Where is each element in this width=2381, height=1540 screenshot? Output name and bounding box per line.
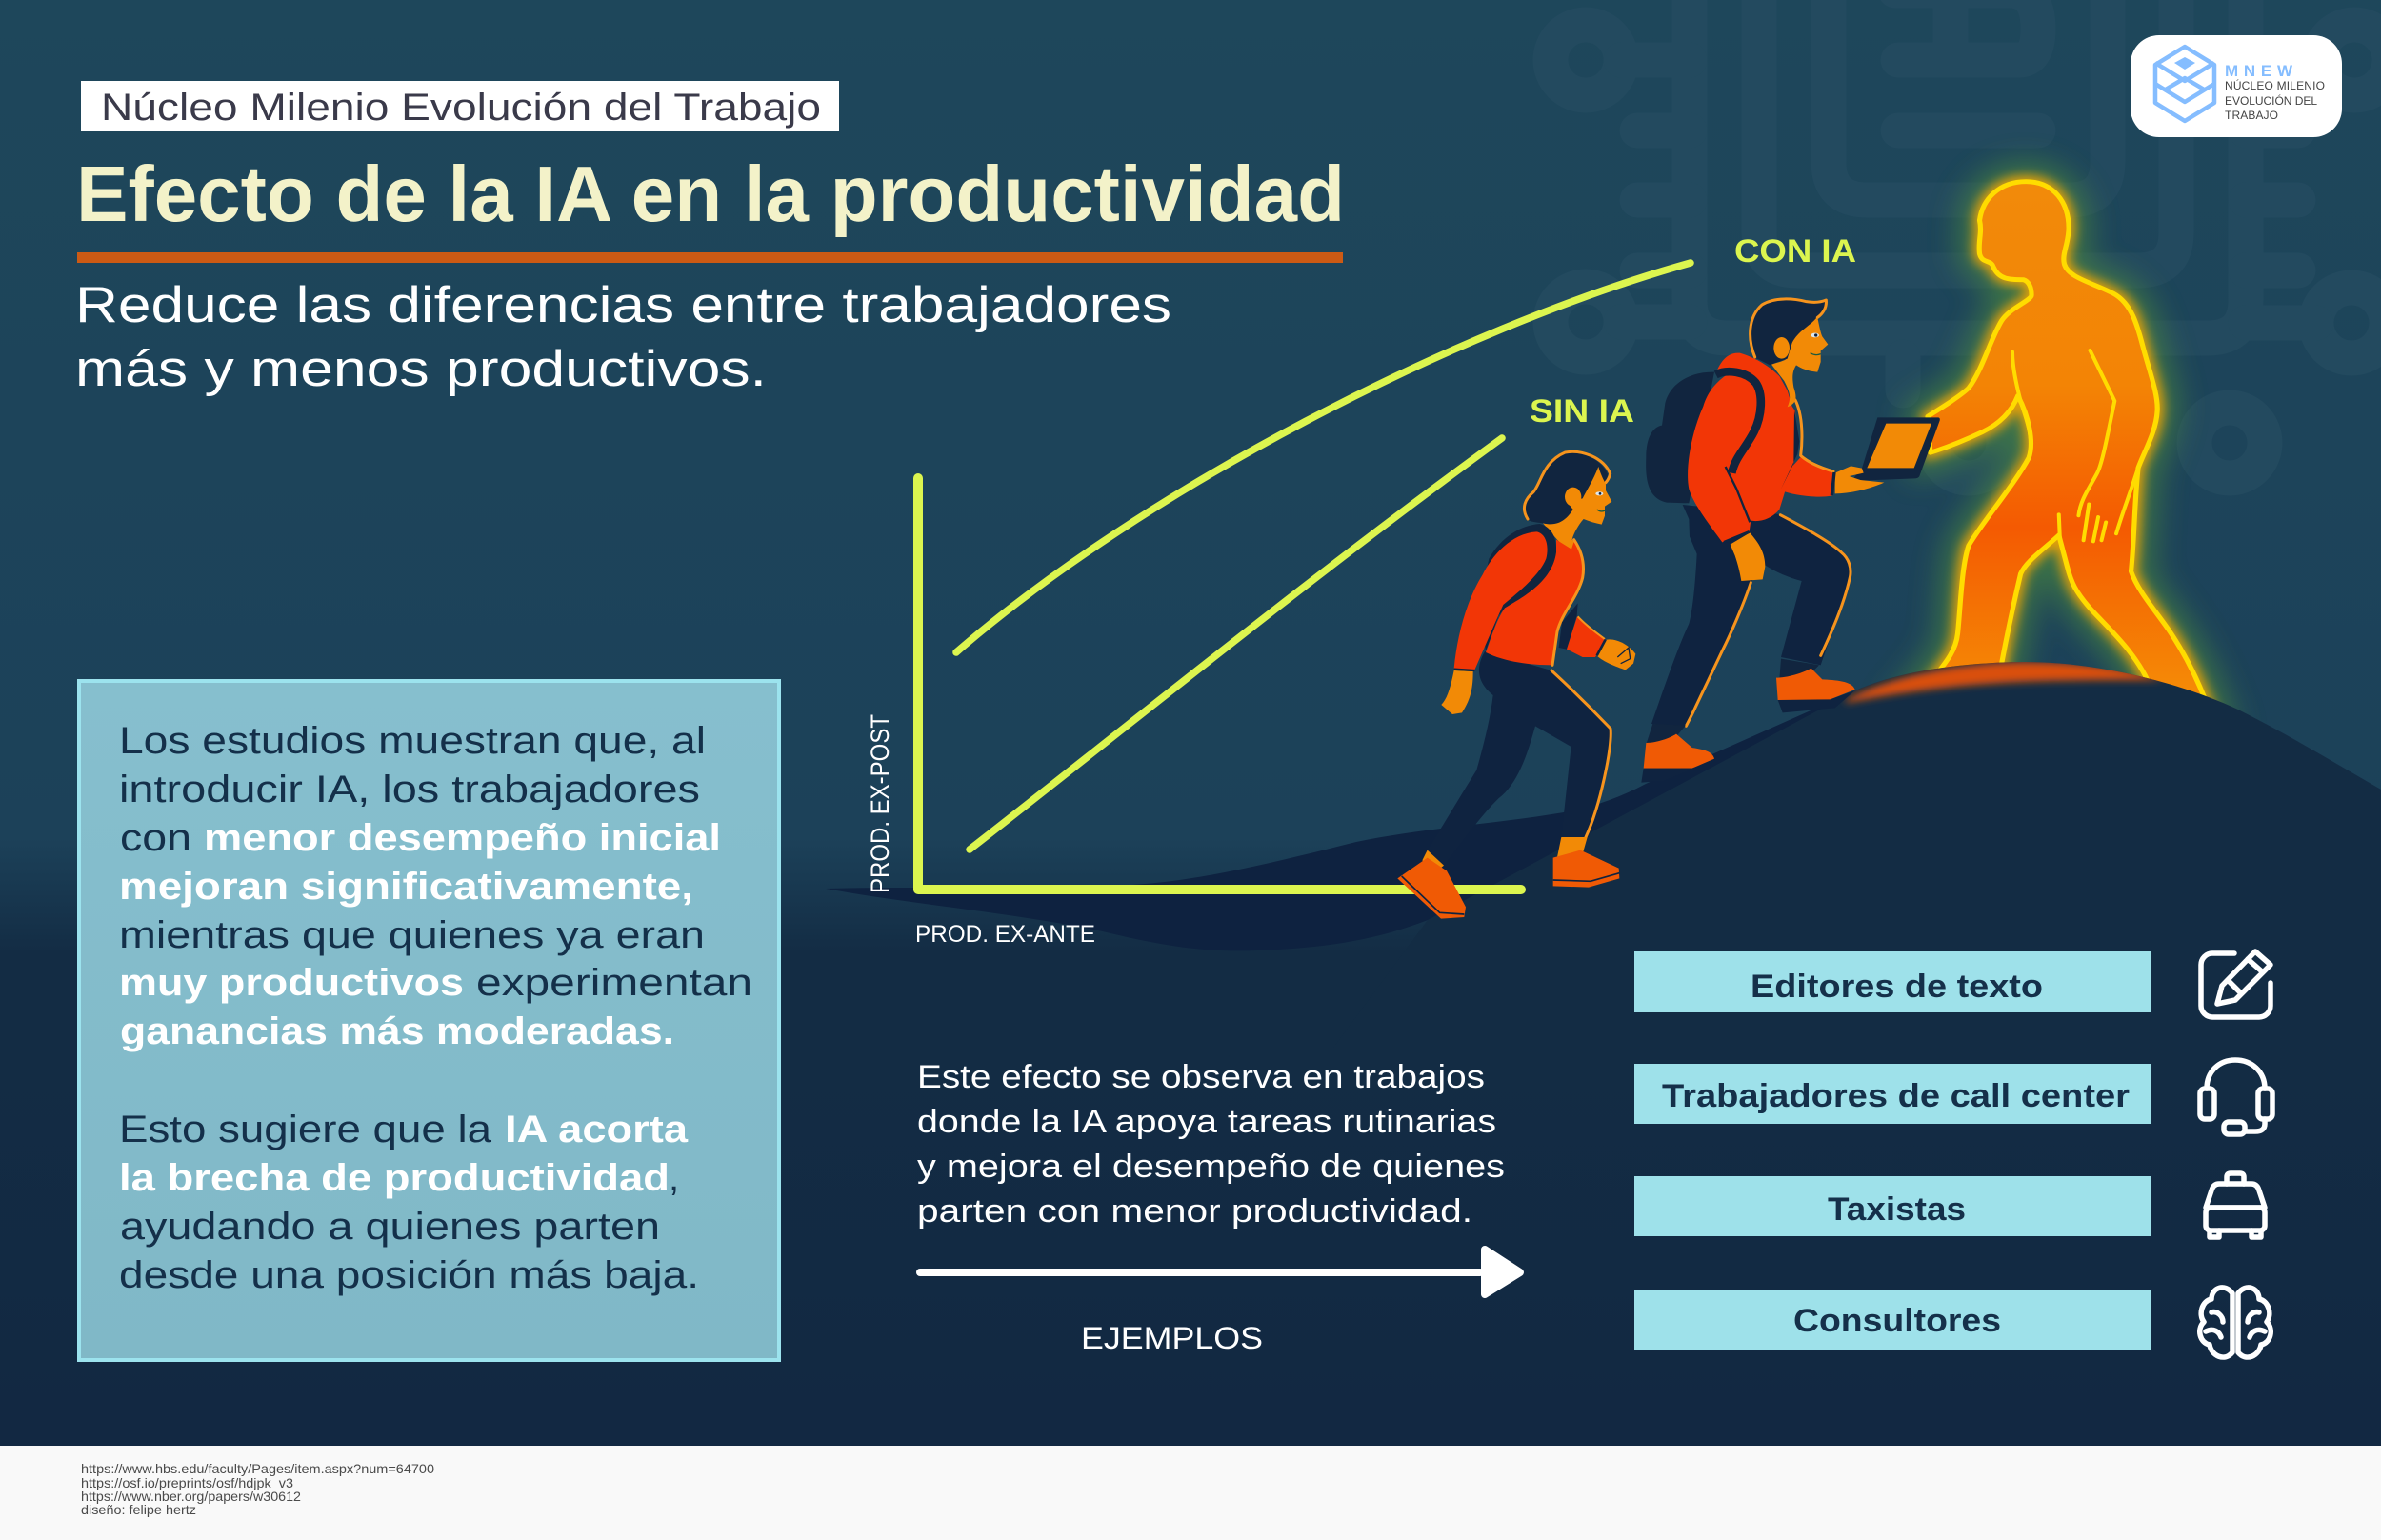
legs [1428,651,1611,866]
icon: pencil and paper [2201,951,2271,1017]
middle explanation text [917,1059,1505,1230]
example: taxistas: Taxistas [1828,1191,1966,1228]
panel: study text: desde una posición más baja. [119,1254,699,1296]
x axis label: PROD. EX-ANTE [915,921,1095,948]
panel: study text: menor desempeño inicial [204,817,721,859]
footer sources: https://osf.io/preprints/osf/hdjpk_v3 [81,1475,293,1490]
icon: headset [2200,1060,2272,1134]
footer sources: https://www.nber.org/papers/w30612 [81,1489,301,1504]
logo: MNEW [2225,62,2293,80]
glowing AI figure [1928,182,2207,703]
side strip [1559,603,1578,650]
label: sin IA: SIN IA [1530,393,1634,430]
arrow [916,1250,1520,1294]
hair [1524,453,1608,525]
middle explanation text: parten con menor productividad. [917,1193,1472,1230]
middle explanation text: Este efecto se observa en trabajos [917,1059,1485,1095]
icon: taxi [2206,1173,2265,1237]
woman [1397,451,1635,919]
panel: study text [79,681,779,1360]
panel: study text: mejoran significativamente, [119,866,693,908]
label: con IA: CON IA [1734,233,1856,270]
logo [2131,35,2342,137]
curve: con IA [956,263,1691,652]
footer sources: https://www.hbs.edu/faculty/Pages/item.aspx?num=64700 [81,1461,434,1476]
man with tablet [1641,299,1940,783]
chart axes [918,478,1521,890]
ankles [1422,837,1588,873]
panel: study text: mientras que quienes ya eran [119,914,705,956]
shoes [1776,669,1855,700]
example: consultores [1634,1290,2151,1350]
forearm [1567,616,1606,657]
chart [866,233,1856,948]
backpack strap [1716,371,1761,473]
backpack strap [1479,524,1556,650]
subtitle: Reduce las diferencias entre trabajadores [75,277,1171,333]
panel: study text: IA acorta [505,1109,689,1150]
header label [81,81,839,131]
ejemplos label: EJEMPLOS [1081,1321,1263,1355]
logo: TRABAJO [2225,109,2278,122]
example: editores de texto [1634,951,2151,1012]
background maze watermark [1551,0,2381,492]
sleeve [1454,531,1548,670]
shoes [1553,850,1619,888]
sleeve edge [1726,467,1750,522]
hand on side [1731,532,1765,581]
subtitle: más y menos productivos. [75,341,767,397]
title: Efecto de la IA en la productividad [76,150,1345,238]
panel: study text: Esto sugiere que la [119,1109,492,1150]
panel: study text: introducir IA, los trabajadores [119,769,700,810]
jacket [1688,353,1796,542]
icon: brain [2200,1288,2271,1357]
hill [1333,662,2381,1048]
hair [1750,299,1826,365]
subtitle [75,277,1171,397]
logo: NÚCLEO MILENIO [2225,78,2325,92]
footer sources [0,1446,2381,1540]
hand on tablet [1835,466,1884,493]
hill shadow [826,692,1895,950]
panel: study text: ganancias más moderadas. [120,1010,674,1052]
torso [1486,540,1583,665]
middle explanation text: y mejora el desempeño de quienes [917,1149,1505,1185]
logo: EVOLUCIÓN DEL [2225,93,2317,108]
example: trabajadores de call center [1634,1064,2151,1124]
example: taxistas [1634,1176,2151,1236]
panel: study text: , [669,1157,679,1199]
hill crest glow [1846,662,2163,703]
eye and mouth [1595,491,1603,495]
logo mark [2155,47,2214,121]
example: consultores: Consultores [1793,1303,2001,1339]
head [1771,317,1828,407]
example: editores de texto: Editores de texto [1751,969,2043,1005]
tablet [1851,417,1940,481]
panel: study text: experimentan [476,962,752,1004]
panel: study text: la brecha de productividad [119,1157,670,1199]
panel: study text: con [120,817,191,859]
header label: Núcleo Milenio Evolución del Trabajo [101,87,821,129]
panel: study text: Los estudios muestran que, al [119,720,706,762]
hands [1597,639,1635,670]
backpack [1646,372,1714,503]
y axis label: PROD. EX-POST [866,714,894,893]
forearm [1781,457,1834,497]
legs [1651,505,1851,727]
ankles [1646,659,1819,745]
footer sources: diseño: felipe hertz [81,1502,196,1517]
line: sin IA [970,438,1502,850]
face and neck [1543,467,1611,550]
panel: study text: ayudando a quienes parten [120,1206,660,1248]
example: trabajadores de call center: Trabajadores de call center [1662,1078,2130,1114]
eye and mouth [1811,333,1819,337]
panel: study text: muy productivos [119,962,464,1004]
middle explanation text: donde la IA apoya tareas rutinarias [917,1104,1496,1140]
title underline [77,252,1343,263]
